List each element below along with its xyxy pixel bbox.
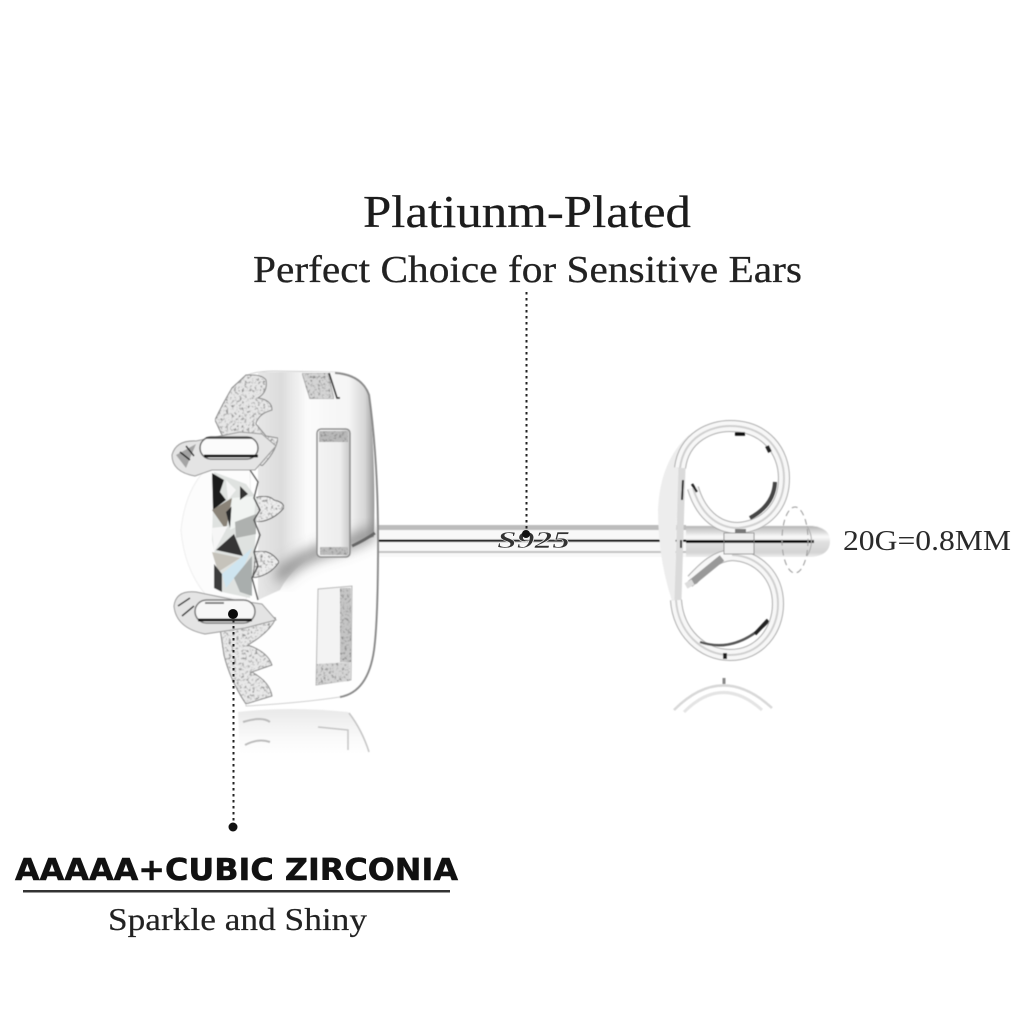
lower window: [316, 586, 352, 685]
bezel curved shadow: [278, 532, 375, 578]
lower loop: [676, 555, 778, 659]
bead teeth: [252, 496, 284, 578]
callout line: zirconia: [228, 609, 238, 832]
heading underline: [23, 890, 450, 892]
center stem: [678, 468, 682, 600]
top slot: [302, 373, 340, 399]
subheading: Sparkle and Shiny: Sparkle and Shiny: [108, 901, 367, 937]
bezel body: [245, 371, 378, 706]
subtitle: Perfect Choice for Sensitive Ears: Perfect Choice for Sensitive Ears: [253, 249, 802, 291]
earring reflection: [238, 709, 370, 754]
earring head: [172, 371, 378, 706]
upper loop: [680, 426, 784, 528]
bezel right edge: [335, 373, 378, 697]
pave crown, upper: [215, 375, 278, 466]
butterfly back clutch: [658, 426, 784, 659]
S925 stamp: S925: [497, 528, 570, 554]
upper prong: [172, 432, 276, 476]
upper window: [317, 429, 350, 557]
infographic canvas: [14, 195, 1010, 938]
clutch reflection: [674, 678, 772, 712]
gauge label: 20G=0.8MM: [843, 526, 1011, 557]
callout line: plating: [522, 292, 530, 538]
heading: cubic zirconia: AAAAA+CUBIC ZIRCONIA: [15, 853, 459, 888]
earring post: [376, 507, 830, 573]
pave crown, lower: [220, 612, 276, 704]
clutch centre sleeve: [724, 531, 754, 554]
clutch back wing: [658, 434, 690, 612]
cubic zirconia stone: [181, 468, 260, 600]
bezel upper shaded side: [258, 372, 374, 600]
title: Platinum-Plated: Platiunm-Plated: [363, 186, 691, 237]
lower prong: [174, 592, 276, 634]
